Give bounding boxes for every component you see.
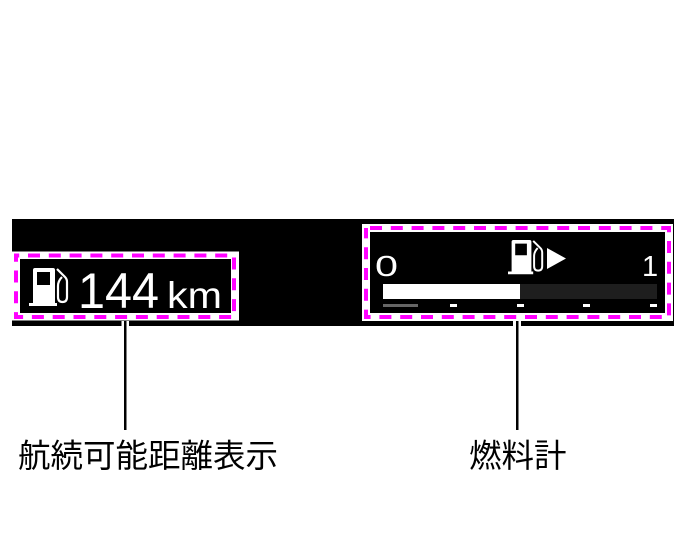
label: fuel gauge: 燃料計 xyxy=(469,438,567,474)
range value: 144 xyxy=(78,263,159,319)
panel: fuel gauge xyxy=(362,224,673,321)
gauge minimum: 0 xyxy=(375,251,398,283)
dashed highlight: range display xyxy=(16,256,234,317)
gauge maximum: 1 xyxy=(642,251,658,283)
fuel level bar xyxy=(383,284,657,299)
panel: range display xyxy=(12,252,239,320)
leader line: range display xyxy=(122,321,129,430)
black band xyxy=(12,219,674,326)
gauge ticks xyxy=(383,304,657,307)
icon: fuel pump with filler side arrow xyxy=(508,240,566,274)
leader line: fuel gauge xyxy=(513,321,521,430)
label: range display: 航続可能距離表示 xyxy=(18,438,278,474)
dashed highlight: fuel gauge xyxy=(366,228,669,317)
range unit: km xyxy=(167,275,222,316)
icon: fuel pump xyxy=(29,268,67,306)
